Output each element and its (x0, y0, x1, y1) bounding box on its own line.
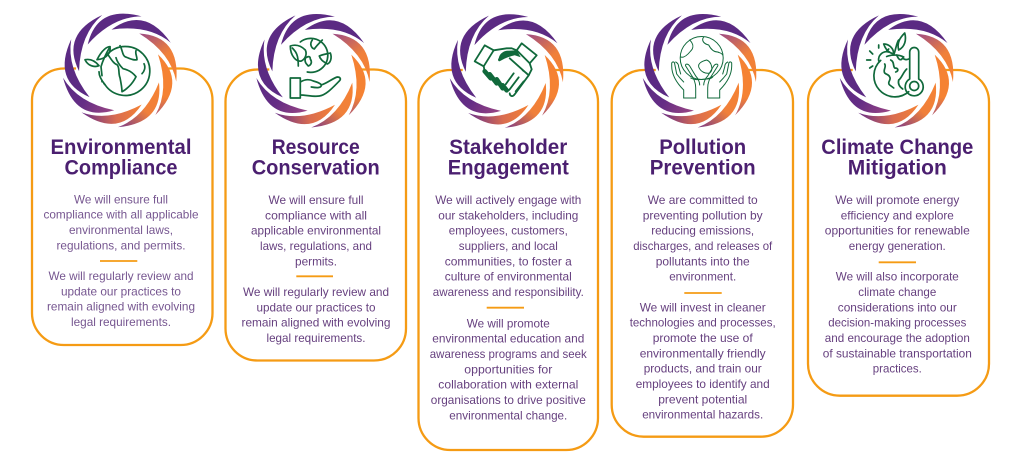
text block 1: permits. (295, 254, 337, 268)
card frame (612, 70, 793, 437)
text block 2 (823, 270, 972, 376)
text block 1 (251, 193, 381, 268)
text block 1: We will ensure full (74, 192, 168, 206)
panel: Climate Change Mitigation (808, 2, 989, 396)
text block 1: environmental laws, (69, 223, 173, 237)
text block 2: promote the use of (653, 331, 753, 345)
text block 2: practices. (873, 362, 922, 376)
title: Climate Change (821, 136, 973, 159)
text block 1: employees, customers, (449, 224, 568, 238)
icon: globe with leaves (85, 46, 150, 95)
icon: globe over open hand (290, 38, 340, 98)
icon: swirl ring (437, 2, 574, 140)
text block 2: remain aligned with evolving (242, 316, 390, 330)
text block 1: culture of environmental (445, 270, 572, 284)
panel: Environmental Compliance (32, 1, 212, 345)
text block 2: employees to identify and (636, 377, 770, 391)
text block 2: technologies and processes, (630, 316, 776, 330)
text block 2: environmentally friendly (640, 346, 766, 360)
text block 2: climate change (858, 285, 937, 299)
title: Environmental (50, 136, 192, 159)
text block 2: We will invest in cleaner (640, 300, 766, 314)
text block 2 (242, 285, 390, 345)
text block 2: and encourage the adoption (825, 331, 970, 345)
text block 2: We will regularly review and (243, 285, 389, 299)
text block 2: awareness programs and seek (430, 347, 588, 361)
text block 2: We will promote (467, 316, 550, 330)
text block 2: environmental hazards. (642, 408, 763, 422)
text block 1: laws, regulations, and (260, 239, 372, 253)
text block 1: communities, to foster a (445, 254, 572, 268)
title: Resource (272, 136, 360, 159)
title: Compliance (64, 156, 178, 180)
text block 2: legal requirements. (266, 331, 366, 345)
text block 1: awareness and responsibility. (433, 285, 584, 299)
icon: swirl ring (630, 2, 767, 140)
title: Pollution (659, 136, 746, 159)
text block 2 (430, 316, 588, 422)
text block 1: energy generation. (849, 239, 946, 253)
panel: Resource Conservation (226, 2, 406, 360)
text block 1: pollutants into the (656, 254, 750, 268)
title (252, 136, 380, 180)
panel: Pollution Prevention (612, 2, 793, 437)
title: Prevention (650, 157, 756, 180)
text block 1: opportunities for renewable (825, 224, 970, 238)
text block 1 (633, 193, 773, 284)
icon: swirl ring (243, 2, 380, 140)
text block 2: considerations into our (838, 300, 957, 314)
text block 1 (825, 193, 970, 253)
text block 2: We will regularly review and (48, 269, 194, 283)
text block 2: decision-making processes (828, 316, 966, 330)
text block 1: compliance with all (265, 208, 367, 222)
text block 1: reducing emissions, (651, 224, 754, 238)
text block 1: preventing pollution by (643, 208, 763, 222)
text block 1: We are committed to (648, 193, 758, 207)
text block 1: regulations, and permits. (56, 238, 186, 252)
text block 1 (44, 192, 199, 252)
text block 2 (630, 300, 776, 422)
text block 1: We will ensure full (268, 193, 364, 207)
text block 2: collaboration with external (438, 378, 578, 392)
icon: globe with thermometer, sun and leaves (867, 33, 923, 97)
text block 2 (47, 269, 195, 329)
icon: hands holding globe (672, 36, 732, 98)
text block 2: products, and train our (644, 362, 762, 376)
title: Mitigation (848, 157, 947, 180)
title (821, 136, 973, 180)
text block 2: update our practices to (256, 300, 376, 314)
title: Stakeholder (449, 136, 567, 159)
title: Conservation (252, 157, 380, 180)
text block 2: environmental change. (449, 408, 567, 422)
card frame (418, 70, 598, 450)
text block 1 (433, 193, 584, 299)
text block 1: We will promote energy (835, 193, 959, 207)
text block 2: We will also incorporate (836, 270, 959, 284)
text block 1: compliance with all applicable (44, 208, 199, 222)
panel: Stakeholder Engagement (418, 2, 598, 450)
text block 1: discharges, and releases of (633, 239, 773, 253)
text block 2: opportunities for (464, 362, 552, 376)
icon: swirl ring (50, 1, 187, 139)
card frame (808, 70, 989, 396)
text block 1: We will actively engage with (435, 193, 581, 207)
title (50, 136, 192, 180)
text block 2: organisations to drive positive (431, 393, 586, 407)
title (650, 136, 756, 180)
text block 1: applicable environmental (251, 224, 381, 238)
text block 2: environmental education and (432, 332, 584, 346)
icon: handshake (475, 43, 537, 96)
text block 2: legal requirements. (71, 315, 171, 329)
title (448, 136, 569, 180)
text block 2: update our practices to (61, 284, 181, 298)
card frame (32, 68, 212, 345)
icon: swirl ring (827, 2, 964, 140)
text block 1: our stakeholders, including (438, 208, 578, 222)
text block 2: prevent potential (658, 392, 747, 406)
text block 2: remain aligned with evolving (47, 300, 195, 314)
text block 2: of sustainable transportation (823, 346, 972, 360)
text block 1: suppliers, and local (459, 239, 558, 253)
text block 1: environment. (669, 270, 736, 284)
card frame (226, 70, 406, 360)
title: Engagement (448, 157, 569, 180)
text block 1: efficiency and explore (841, 208, 954, 222)
